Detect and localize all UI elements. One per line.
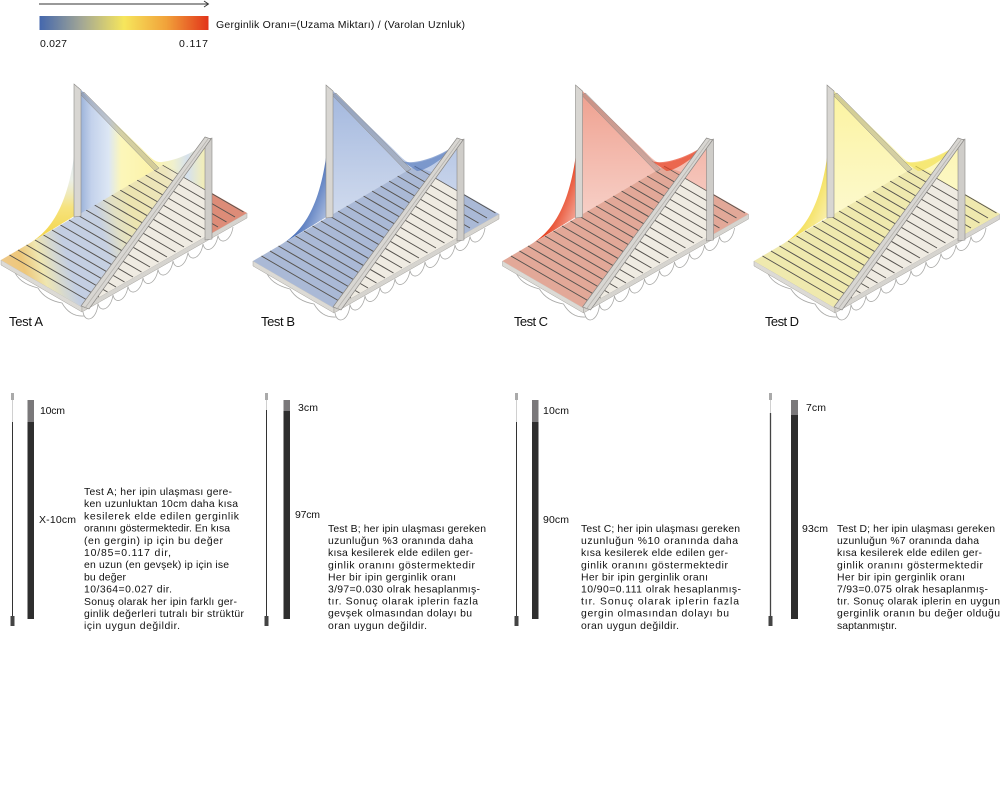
rope diagram: Test D [768, 393, 828, 626]
label: Test B: Test B [261, 314, 295, 329]
rope diagram: Test B: 97cm [295, 509, 320, 521]
text block: Test D: ginlik oranını göstermektedir [837, 560, 984, 571]
rope diagram: Test A: X-10cm [39, 514, 76, 526]
text block: Test B: Test B; her ipin ulaşması gereken [328, 524, 486, 535]
text block: Test C: 10/90=0.111 olrak hesaplanmış- [581, 584, 741, 596]
panel: Test C structure [502, 85, 748, 320]
text block: Test C: kısa kesilerek elde edilen ger- [581, 548, 728, 559]
label: Test D: Test D [765, 314, 799, 329]
text block: Test D: 7/93=0.075 olrak hesaplanmış- [837, 584, 988, 596]
legend formula: Gerginlik Oranı=(Uzama Miktarı) / (Varolan Uznluk) [216, 19, 465, 31]
text block: Test A: Test A; her ipin ulaşması gere- [84, 487, 232, 498]
panel: Test B structure [253, 85, 499, 320]
rope diagram: Test C: 10cm [543, 405, 569, 417]
text block: Test A: 10/364=0.027 dir. [84, 585, 172, 596]
rope diagram: Test C [514, 393, 569, 626]
text block: Test D: Test D; her ipin ulaşması gereken [837, 524, 995, 535]
text block: Test C: ginlik oranını göstermektedir [581, 560, 729, 571]
legend: colour scale: 0.117 [179, 38, 208, 50]
text block: Test A: kesilerek elde edilen gerginlik [84, 511, 240, 522]
text block: Test A: (en gergin) ip için bu değer [84, 536, 224, 547]
text block: Test C: tır. Sonuç olarak iplerin fazla [581, 597, 739, 608]
text block: Test B: ginlik oranını göstermektedir [328, 560, 476, 571]
rope diagram: Test C: 90cm [543, 514, 569, 526]
panel: Test A structure [1, 84, 247, 319]
text block: Test A: Sonuş olarak her ipin farklı ger- [84, 597, 237, 608]
text block: Test A: en uzun (en gevşek) ip için ise [84, 560, 229, 571]
text block: Test D: saptanmıştır. [837, 621, 897, 632]
text block: Test B: kısa kesilerek elde edilen ger- [328, 548, 473, 559]
text block: Test C: gergin olmasından dolayı bu [581, 609, 729, 620]
text block: Test A [84, 487, 245, 632]
rope diagram: Test D: 7cm [806, 402, 826, 414]
rope diagram: Test A [10, 393, 76, 626]
text block: Test A: oranını göstermektedir. En kısa [84, 524, 230, 535]
text block: Test A: ken uzunluktan 10cm daha kısa [84, 499, 238, 510]
rope diagram: Test A: 10cm [40, 405, 65, 417]
text block: Test A: için uygun değildir. [84, 621, 180, 632]
text block: Test A: bu değer [84, 572, 127, 583]
text block: Test B: Her bir ipin gerginlik oranı [328, 572, 456, 583]
text block: Test D: kısa kesilerek elde edilen ger- [837, 548, 982, 559]
text block: Test B: tır. Sonuç olarak iplerin fazla [328, 597, 478, 608]
panel: Test D structure [754, 85, 1000, 320]
direction arrow [39, 1, 208, 7]
rope diagram: Test B: 3cm [298, 402, 318, 414]
text block: Test C [581, 524, 741, 632]
text block: Test C: Her bir ipin gerginlik oranı [581, 572, 708, 583]
rope diagram: Test D: 93cm [802, 523, 828, 535]
text block: Test C: uzunluğun %10 oranında daha [581, 536, 738, 547]
text block: Test D [837, 524, 1000, 632]
label: Test A: Test A [9, 314, 43, 329]
text block: Test A: 10/85=0.117 dir, [84, 548, 171, 559]
rope diagram: Test B [264, 393, 320, 626]
text block: Test B: gevşek olmasından dolayı bu [328, 609, 472, 620]
text block: Test C: oran uygun değildir. [581, 621, 679, 632]
label: Test C: Test C [514, 314, 548, 329]
text block: Test B: oran uygun değildir. [328, 621, 427, 632]
legend: colour scale [40, 16, 465, 50]
legend: colour scale: 0.027 [40, 38, 67, 50]
text block: Test D: gerginlik oranın bu değer olduğu [837, 609, 1000, 620]
text block: Test A: ginlik değerleri tutralı bir strüktür [84, 609, 245, 620]
text block: Test D: tır. Sonuç olarak iplerin en uygun [837, 597, 1000, 608]
text block: Test D: uzunluğun %7 oranında daha [837, 536, 979, 547]
text block: Test D: Her bir ipin gerginlik oranı [837, 572, 965, 583]
text block: Test B: 3/97=0.030 olrak hesaplanmış- [328, 584, 480, 596]
text block: Test C: Test C; her ipin ulaşması gereken [581, 524, 740, 535]
text block: Test B [328, 524, 486, 632]
text block: Test B: uzunluğun %3 oranında daha [328, 536, 473, 547]
